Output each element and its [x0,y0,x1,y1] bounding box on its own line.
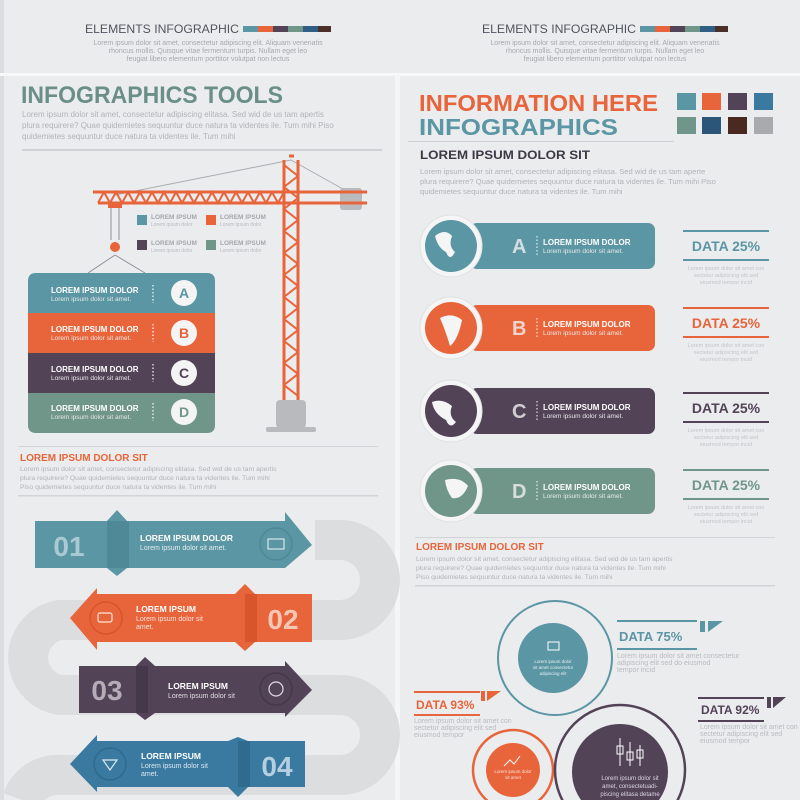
arrow 04 [70,735,305,797]
globe rows: LOREM IPSUM DOLOR [543,483,631,492]
data 92%: DATA 92% [701,703,760,717]
arrow 03: Lorem ipsum dolor sit [168,693,235,700]
data 92% [698,697,798,745]
arrow 01 [35,510,312,576]
panel: ABCD list: C [179,365,189,381]
globe rows [420,215,655,522]
text block: right lorem: Lorem ipsum dolor sit amet, consectetur adipiscing elitasa. Sed wid de us tam apertis [416,556,673,563]
arrow 02 [70,584,312,651]
header right: ELEMENTS INFOGRAPHIC [482,22,636,36]
arrow 02: amet. [136,624,154,631]
data 92%: eiusmod tempor [700,738,751,745]
data 93%: sectetur adipiscing elit sed [414,725,496,732]
data 25% labels [683,230,769,525]
data 25% labels: eiusmod tempor incid [700,357,752,363]
data 75%: Lorem ipsum dolor sit amet consectetur [617,653,740,660]
text block: right intro: Lorem ipsum dolor sit amet, consectetur adipiscing elitasa. Sed wid de us tam aperte [420,167,705,176]
crane legend: LOREM IPSUM [151,240,197,247]
header left: rhoncus mollis. Quisque vitae fermentum turpis. Nullam eget leo [109,48,307,55]
crane legend: Lorem ipsum dolor [151,222,193,228]
data 25% labels: DATA 25% [692,315,761,331]
data 93%: Lorem ipsum dolor sit amet con [414,718,512,725]
globe rows: C [512,401,526,423]
circle chart: orange 93: sit amet [505,775,522,780]
circle chart: teal 75: Lorem ipsum dolor [534,659,572,664]
text block: right intro [420,148,716,196]
text block: right lorem: LOREM IPSUM DOLOR SIT [416,542,544,553]
title: information here infographics: INFORMATION HERE [419,90,658,116]
arrow 04: amet. [141,771,159,778]
data 25% labels: sectetur adipiscing elit sed [694,273,758,279]
data 75%: DATA 75% [619,629,683,644]
data 75%: adipiscing elit sed do eiusmod [617,660,710,667]
circle chart: teal 75: adipiscing elit [539,671,567,676]
header left: ELEMENTS INFOGRAPHIC [85,22,239,36]
circle chart: orange 93 [473,730,553,800]
title: infographics tools [21,82,334,141]
globe rows: Lorem ipsum dolor sit amet. [543,413,623,420]
text block: right intro: quidemietes sequuntur duce natura ta videntes ile. Tum mihi [420,187,623,196]
globe rows: D [512,481,526,503]
panel: ABCD list: Lorem ipsum dolor sit amet. [51,375,131,382]
colour swatches [677,93,773,134]
data 25% labels: sectetur adipiscing elit sed [694,512,758,518]
header right: Lorem ipsum dolor sit amet, consectetur adipiscing elit. Aliquam venenatis [490,40,720,47]
arrow 03 [79,657,312,720]
globe rows: Lorem ipsum dolor sit amet. [543,248,623,255]
data 75%: tempor incid [617,667,655,674]
circle chart: purple 92 [555,705,685,800]
text block: left lorem: LOREM IPSUM DOLOR SIT [20,453,148,464]
crane legend: Lorem ipsum dolor [220,222,262,228]
data 25% labels: Lorem ipsum dolor sit amet con [688,428,764,434]
panel: ABCD list: LOREM IPSUM DOLOR [51,286,139,295]
panel: ABCD list: B [179,325,189,341]
header left: feugiat libero elementum porttitor volutpat non lectus [127,56,290,63]
arrow 04: 04 [261,751,293,782]
data 25% labels: eiusmod tempor incid [700,519,752,525]
text block: right lorem: plura requirere? Quae quidemietes sequuntur duce natura ta videntes ile. Tum mihi [416,565,666,572]
title: infographics tools: quidemietes sequuntur duce natura ta videntes ile. Tum mihi [22,132,236,141]
data 25% labels: eiusmod tempor incid [700,442,752,448]
snake path background [22,540,380,800]
arrow 02: 02 [267,604,299,635]
header left [85,22,331,63]
panel: ABCD list: LOREM IPSUM DOLOR [51,365,139,374]
crane legend: LOREM IPSUM [220,214,266,221]
panel: ABCD list: LOREM IPSUM DOLOR [51,404,139,413]
text block: left lorem: Piso quidemietes sequuntur duce natura ta videntes ile. Tum mihi [20,484,217,491]
crane legend: Lorem ipsum dolor [220,248,262,254]
circle chart: teal 75 [498,601,612,715]
arrow 02: Lorem ipsum dolor sit [136,616,203,623]
data 25% labels: sectetur adipiscing elit sed [694,435,758,441]
text block: right intro: LOREM IPSUM DOLOR SIT [420,148,591,162]
arrow 04: LOREM IPSUM [141,751,201,761]
header right: feugiat libero elementum porttitor volutpat non lectus [524,56,687,63]
title: infographics tools: Lorem ipsum dolor sit amet, consectetur adipiscing elitasa. Sed wid de us tam apertis [22,110,324,119]
crane legend: LOREM IPSUM [220,240,266,247]
arrow 01: Lorem ipsum dolor sit amet. [140,545,226,552]
globe rows: LOREM IPSUM DOLOR [543,320,631,329]
circle chart: orange 93: Lorem ipsum dolor [494,769,532,774]
text block: left lorem: plura requirere? Quae quidemietes sequuntur duce natura ta videntes ile. Tum mihi [20,475,270,482]
panel: ABCD list: LOREM IPSUM DOLOR [51,325,139,334]
header left: Lorem ipsum dolor sit amet, consectetur adipiscing elit. Aliquam venenatis [93,40,323,47]
data 25% labels: Lorem ipsum dolor sit amet con [688,266,764,272]
globe rows: A [512,236,526,258]
text block: left lorem [18,446,378,496]
circle chart: teal 75: sit amet consectetur [533,665,574,670]
panel: ABCD list: Lorem ipsum dolor sit amet. [51,414,131,421]
data 25% labels: DATA 25% [692,400,761,416]
circle chart: purple 92: piscing elitasa detame [600,792,660,798]
crane legend: LOREM IPSUM [151,214,197,221]
crane legend: Lorem ipsum dolor [151,248,193,254]
globe rows: B [512,318,526,340]
panel: ABCD list: Lorem ipsum dolor sit amet. [51,296,131,303]
data 75% [617,620,740,674]
arrow 04: Lorem ipsum dolor sit [141,763,208,770]
title: information here infographics [419,90,658,140]
header right [482,22,728,63]
data 92%: sectetur adipiscing elit sed [700,731,782,738]
data 25% labels: DATA 25% [692,477,761,493]
arrow 01: LOREM IPSUM DOLOR [140,533,233,543]
arrow 03: 03 [91,675,123,706]
title: information here infographics: INFOGRAPHICS [419,114,618,140]
title: infographics tools: INFOGRAPHICS TOOLS [21,82,283,109]
data 25% labels: Lorem ipsum dolor sit amet con [688,505,764,511]
text block: right intro: plura requirere? Quae quidemietes sequuntur duce natura ta videntes ile. Tum mihi Piso [420,177,716,186]
text block: right lorem: Piso quidemietes sequuntur duce natura ta videntes ile. Tum mihi [416,574,613,581]
panel: ABCD list [28,273,215,433]
globe rows: Lorem ipsum dolor sit amet. [543,330,623,337]
data 93%: eiusmod tempor [414,732,465,739]
data 93% [414,691,512,739]
arrow 02: LOREM IPSUM [136,604,196,614]
circle chart: purple 92: amet, consectetuadi- [602,784,658,790]
data 93%: DATA 93% [416,698,475,712]
data 25% labels: sectetur adipiscing elit sed [694,350,758,356]
arrow 01: 01 [53,531,85,562]
data 25% labels: eiusmod tempor incid [700,280,752,286]
globe rows: LOREM IPSUM DOLOR [543,403,631,412]
data 92%: Lorem ipsum dolor sit amet con [700,724,798,731]
crane [88,156,367,432]
panel: ABCD list: D [179,404,189,420]
panel: ABCD list: Lorem ipsum dolor sit amet. [51,335,131,342]
data 25% labels: DATA 25% [692,238,761,254]
title: infographics tools: plura requirere? Quae quidemietes sequuntur duce natura ta videntes ile. Tum mihi Piso [22,121,334,130]
text block: left lorem: Lorem ipsum dolor sit amet, consectetur adipiscing elitasa. Sed wid de us tam apertis [20,466,277,473]
panel: ABCD list: A [179,285,189,301]
data 25% labels: Lorem ipsum dolor sit amet con [688,343,764,349]
header right: rhoncus mollis. Quisque vitae fermentum turpis. Nullam eget leo [506,48,704,55]
text block: right lorem [415,537,775,586]
globe rows: LOREM IPSUM DOLOR [543,238,631,247]
circle chart: purple 92: Lorem ipsum dolor sit [601,776,659,782]
globe rows: Lorem ipsum dolor sit amet. [543,493,623,500]
arrow 03: LOREM IPSUM [168,681,228,691]
crane legend [137,214,266,254]
